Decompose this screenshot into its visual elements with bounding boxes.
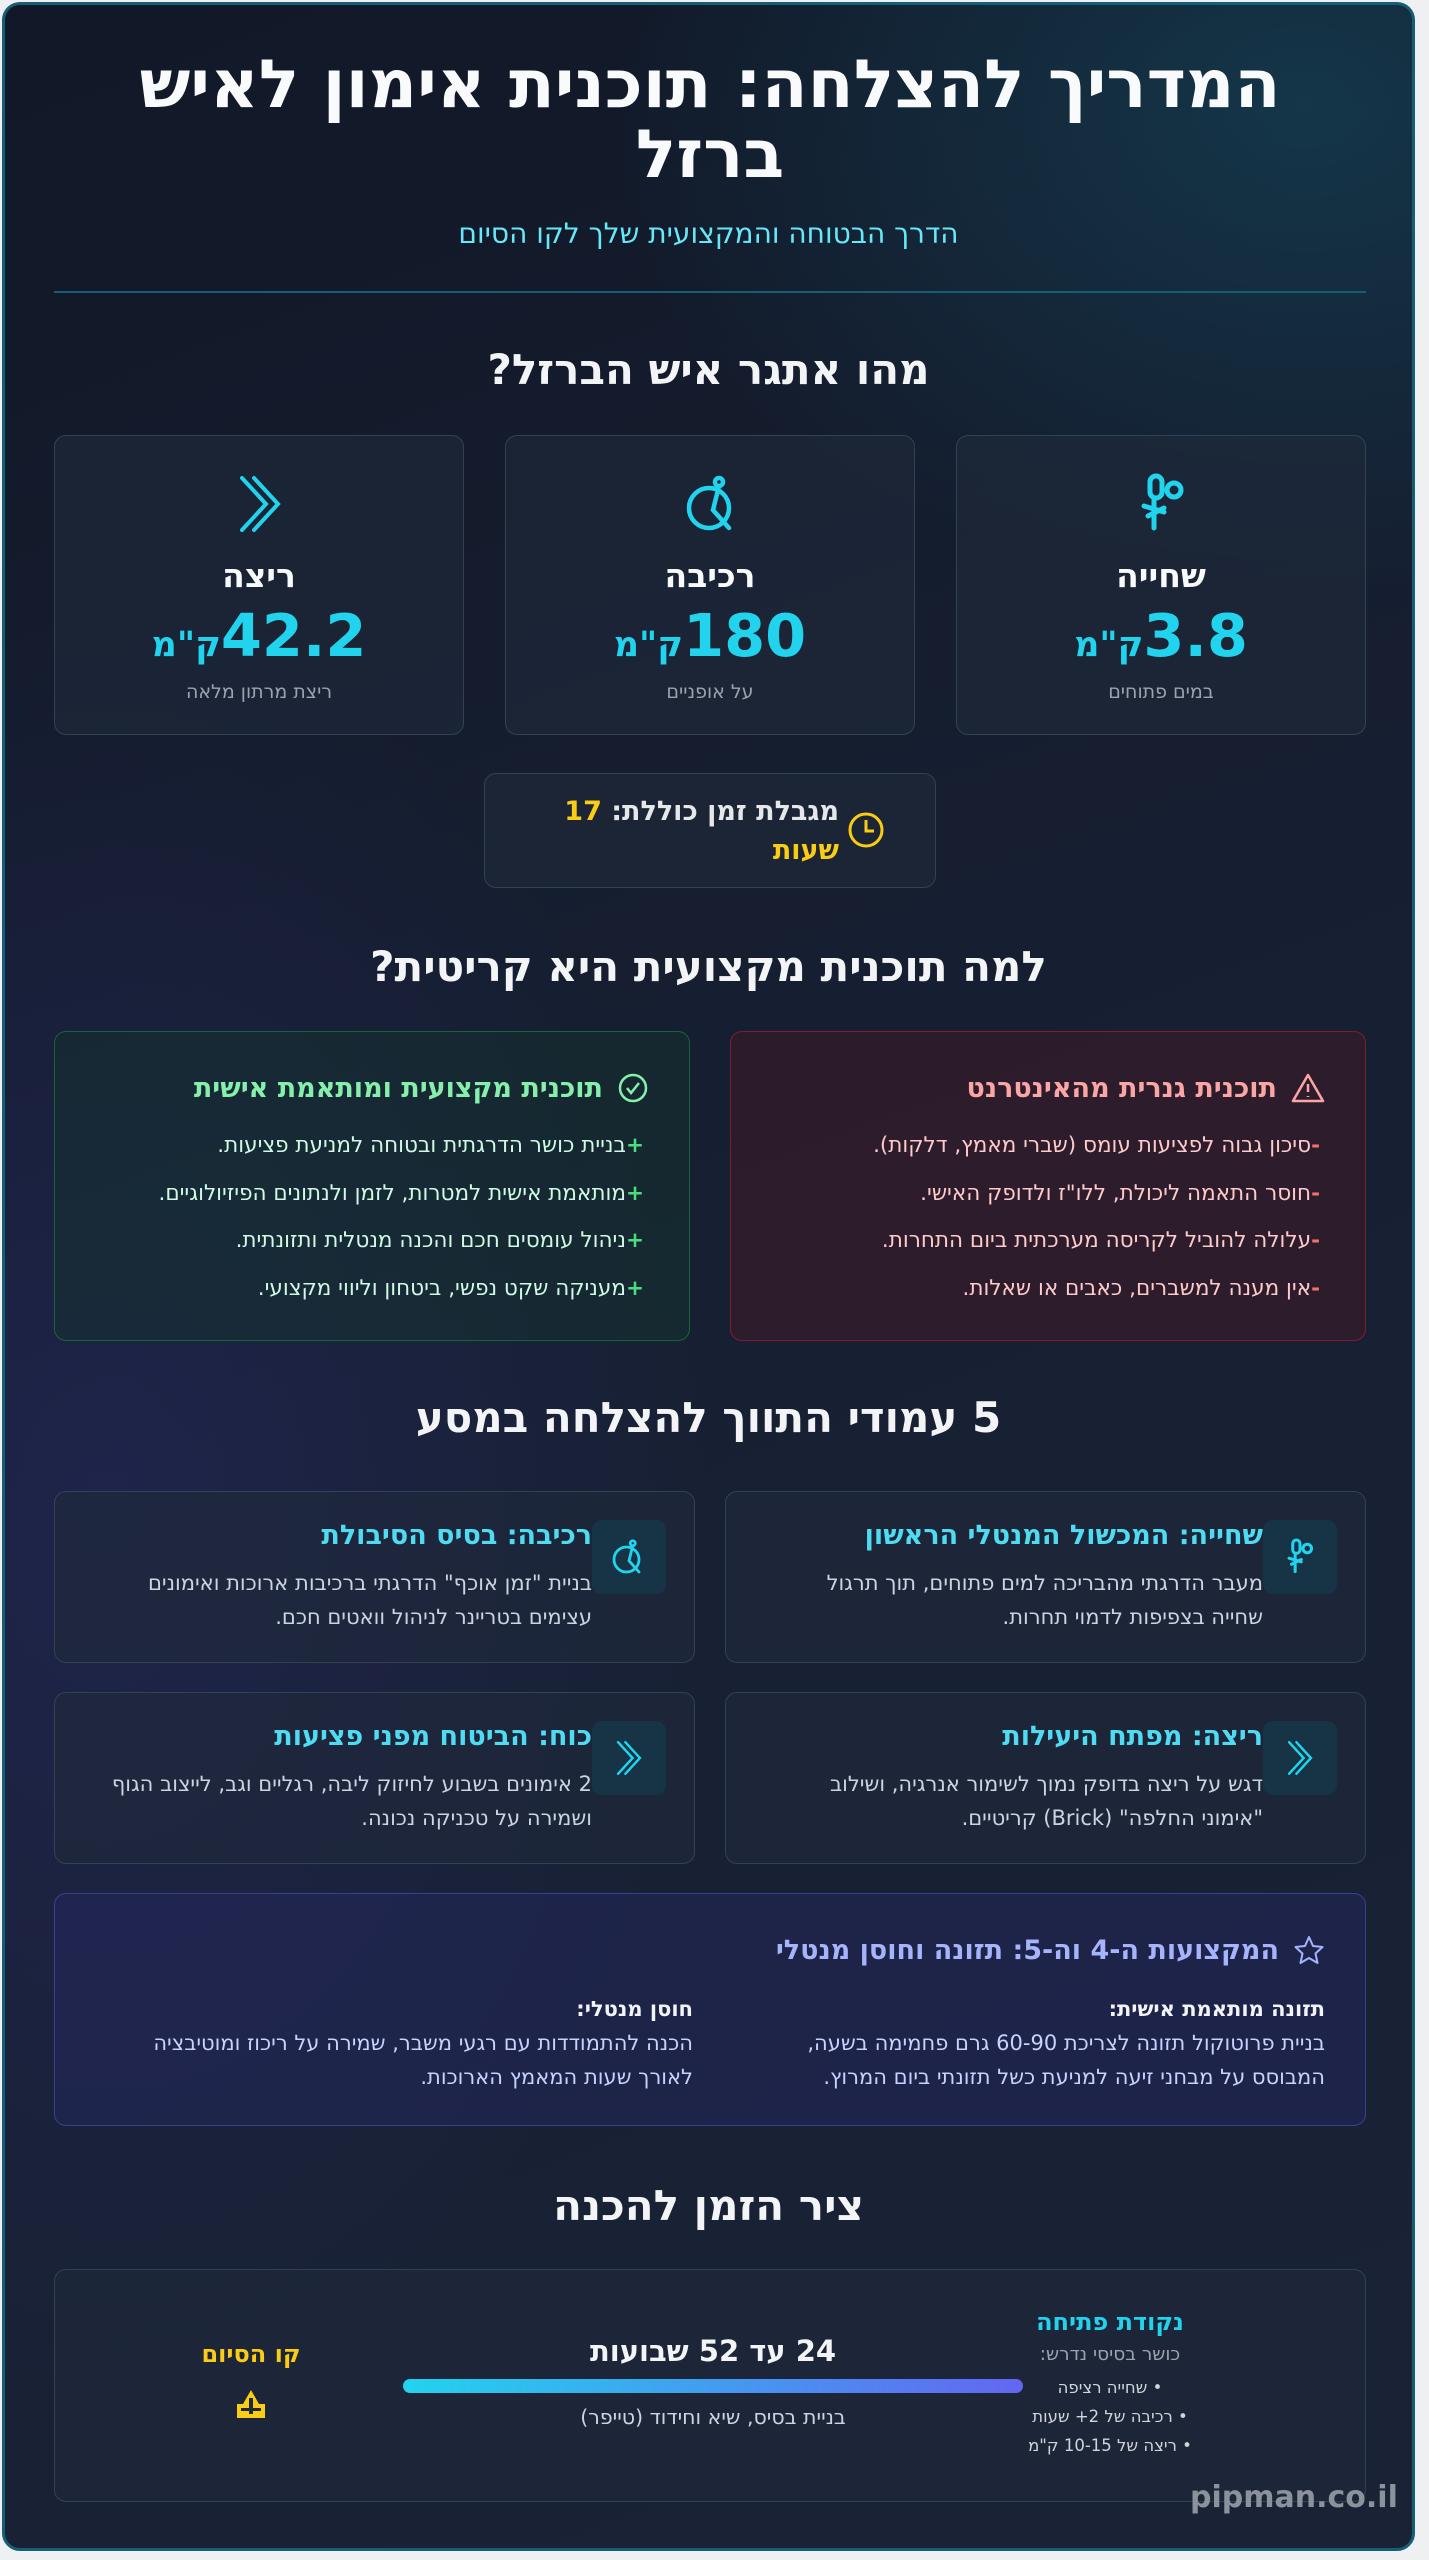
- icon: check: [618, 1074, 648, 1102]
- duration bar: בניית בסיס, שיא וחידוד (טייפר): [580, 2405, 846, 2429]
- text: mental: הכנה להתמודדות עם רגעי משבר, שמירה על ריכוז ומוטיבציה לאורך שעות המאמץ הארוכות.: [153, 2031, 693, 2089]
- start point: [1028, 2308, 1192, 2455]
- panel: professional plan (good): +מותאמת אישית למטרות, לזמן ולנתונים הפיזיולוגיים.: [159, 1180, 644, 1206]
- pillar: strength: 2 אימונים בשבוע לחיזוק ליבה, רגליים וגב, לייצוב הגוף ושמירה על טכניקה נכונה.: [112, 1772, 592, 1830]
- stat card: run: ריצה: [222, 556, 296, 595]
- icon: finish: [237, 2390, 265, 2418]
- start point: כושר בסיסי נדרש:: [1040, 2344, 1180, 2365]
- stat card: bike: רכיבה: [664, 556, 756, 595]
- stat card: swim: במים פתוחים: [1108, 681, 1214, 703]
- icon: strength: [592, 1721, 666, 1795]
- stat card: swim: [956, 435, 1366, 735]
- stat card: bike: 180ק"מ: [614, 601, 806, 670]
- panel: generic plan (bad): [730, 1031, 1366, 1341]
- pillar: bike: בניית "זמן אוכף" הדרגתי ברכיבות ארוכות ואימונים עצימים בטריינר לניהול וואטים חכם.: [148, 1571, 592, 1629]
- timeline panel: [54, 2269, 1366, 2502]
- icon: swim: [1142, 474, 1184, 530]
- icon: bike: [592, 1520, 666, 1594]
- pillar: swim: מעבר הדרגתי מהבריכה למים פתוחים, תוך תרגול שחייה בצפיפות לדמוי תחרות.: [827, 1571, 1263, 1629]
- finish line: [201, 2340, 301, 2418]
- time limit box: [484, 773, 936, 888]
- stat card: run: ריצת מרתון מלאה: [186, 681, 332, 703]
- pillar: strength: כוח: הביטוח מפני פציעות: [274, 1721, 592, 1752]
- heading: 5 pillars: 5 עמודי התווך להצלחה במסע: [416, 1393, 1001, 1442]
- start point: • שחייה רציפה: [1058, 2378, 1162, 2397]
- stat card: run: [54, 435, 464, 735]
- text: nutrition: תזונה מותאמת אישית:: [1109, 1997, 1325, 2021]
- text: mental: [153, 1997, 693, 2089]
- pillar: run: [725, 1692, 1366, 1864]
- stat card: bike: על אופניים: [666, 681, 754, 703]
- stat card: swim: 3.8ק"מ: [1074, 601, 1248, 670]
- duration bar: 24 עד 52 שבועות: [590, 2334, 836, 2368]
- start point: • רכיבה של 2+ שעות: [1032, 2407, 1188, 2426]
- panel: generic plan (bad): -סיכון גבוה לפציעות עומס (שברי מאמץ, דלקות).: [873, 1133, 1320, 1158]
- stat card: run: 42.2ק"מ: [152, 601, 366, 670]
- text: nutrition: בניית פרוטוקול תזונה לצריכת 60-90 גרם פחמימה בשעה, המבוסס על מבחני זיעה למניעת כשל תזונתי ביום המרוץ.: [807, 2031, 1325, 2089]
- icon: warning: [1292, 1074, 1324, 1102]
- panel: generic plan (bad): -אין מענה למשברים, כאבים או שאלות.: [962, 1276, 1320, 1300]
- panel: generic plan (bad): -עלולה להוביל לקריסה מערכתית ביום התחרות.: [882, 1228, 1320, 1253]
- text: mental: חוסן מנטלי:: [576, 1997, 693, 2021]
- icon: bike: [686, 476, 732, 530]
- subtitle: הדרך הבטוחה והמקצועית שלך לקו הסיום: [458, 217, 959, 250]
- stat card: bike: [505, 435, 915, 735]
- panel: professional plan (good): תוכנית מקצועית ומותאמת אישית: [194, 1072, 603, 1104]
- pillar: strength: [54, 1692, 695, 1864]
- pillar: bike: רכיבה: בסיס הסיבולת: [321, 1520, 592, 1551]
- watermark: pipman.co.il: [1190, 2480, 1398, 2515]
- finish line: קו הסיום: [201, 2340, 301, 2368]
- heading: what is ironman: מהו אתגר איש הברזל?: [488, 345, 929, 394]
- start point: נקודת פתיחה: [1036, 2308, 1184, 2336]
- icon: clock: [848, 812, 884, 848]
- panel: professional plan (good): +ניהול עומסים חכם והכנה מנטלית ותזונתית.: [236, 1228, 644, 1253]
- text: nutrition: [807, 1997, 1325, 2089]
- stat card: swim: שחייה: [1116, 556, 1206, 595]
- heading: why professional: למה תוכנית מקצועית היא קריטית?: [370, 942, 1047, 991]
- pillar: bike: [54, 1491, 695, 1663]
- time limit box: מגבלת זמן כוללת: 17 שעות: [564, 796, 839, 866]
- pillar: run: דגש על ריצה בדופק נמוך לשימור אנרגיה, ושילוב "אימוני החלפה" (Brick) קריטיים.: [830, 1772, 1263, 1830]
- panel: generic plan (bad): תוכנית גנרית מהאינטרנט: [967, 1072, 1277, 1104]
- panel: professional plan (good): [54, 1031, 690, 1341]
- icon: run: [240, 476, 281, 532]
- icon: swim: [1263, 1520, 1337, 1594]
- panel: professional plan (good): +מעניקה שקט נפשי, ביטחון וליווי מקצועי.: [258, 1276, 644, 1300]
- pillar: run: ריצה: מפתח היעילות: [1002, 1721, 1263, 1752]
- icon: run: [1263, 1721, 1337, 1795]
- panel: professional plan (good): +בניית כושר הדרגתית ובטוחה למניעת פציעות.: [217, 1133, 644, 1158]
- panel: nutrition and mental: [54, 1893, 1366, 2126]
- panel: generic plan (bad): -חוסר התאמה ליכולת, ללו"ז ולדופק האישי.: [920, 1180, 1320, 1206]
- title: המדריך להצלחה: תוכנית אימון לאיש ברזל: [139, 45, 1281, 193]
- pillar: swim: שחייה: המכשול המנטלי הראשון: [865, 1520, 1263, 1551]
- heading with star icon: המקצועות ה-4 וה-5: תזונה וחוסן מנטלי: [776, 1934, 1279, 1966]
- start point: • ריצה של 10-15 ק"מ: [1028, 2436, 1192, 2455]
- duration bar: [403, 2334, 1023, 2429]
- pillar: swim: [725, 1491, 1366, 1663]
- heading: timeline: ציר הזמן להכנה: [553, 2181, 864, 2230]
